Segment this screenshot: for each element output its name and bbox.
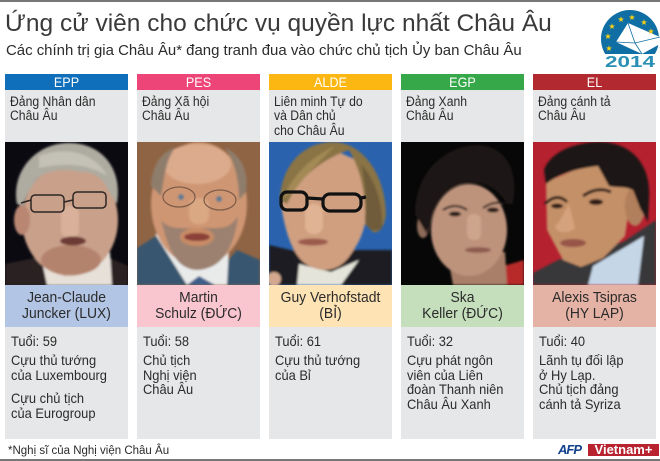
EGP tag <box>401 74 524 90</box>
age: Tuổi: 40 <box>539 333 585 349</box>
biography <box>143 352 197 397</box>
Vietnam+ credit: Vietnam+ <box>595 442 652 457</box>
icon: 2014 election logo: ★ <box>617 15 625 24</box>
EGP tag: EGP <box>449 74 476 90</box>
Vietnam+ credit <box>588 444 659 456</box>
EL tag: EL <box>587 74 602 90</box>
candidate name: Jean-Claude <box>27 290 106 306</box>
bottom rule <box>0 459 660 461</box>
party name: và Dân chủ <box>274 108 336 124</box>
top rule <box>0 0 660 2</box>
age: Tuổi: 59 <box>11 333 57 349</box>
EPP tag <box>5 74 128 90</box>
biography: viên của Liên <box>407 367 483 383</box>
panel: ALDE Verhofstadt <box>269 74 392 439</box>
PES tag: PES <box>186 74 211 90</box>
ALDE tag: ALDE <box>314 74 347 90</box>
icon: 2014 election logo: ★ <box>605 44 613 53</box>
biography: của Luxembourg <box>11 367 107 383</box>
party name: Liên minh Tự do <box>274 94 363 110</box>
biography <box>11 352 107 421</box>
party name <box>538 94 611 124</box>
biography: Chủ tịch <box>143 352 190 368</box>
candidate name: Guy Verhofstadt <box>281 290 380 306</box>
candidate name <box>533 285 656 327</box>
footnote: *Nghị sĩ của Nghị viện Châu Âu <box>8 445 169 457</box>
icon: 2014 election logo: ★ <box>604 32 612 41</box>
icon: 2014 election logo: ★ <box>608 22 616 31</box>
biography: Cựu thủ tướng <box>275 352 360 368</box>
party name: cho Châu Âu <box>274 123 345 139</box>
party name: Đảng cánh tả <box>538 94 611 110</box>
candidate name <box>5 285 128 327</box>
candidate name: Alexis Tsipras <box>552 290 637 306</box>
candidate name <box>401 285 524 327</box>
party name: Đảng Xanh <box>406 94 467 110</box>
icon: 2014 election logo <box>601 10 660 69</box>
EL tag <box>533 74 656 90</box>
age: Tuổi: 32 <box>407 333 453 349</box>
biography: của Bỉ <box>275 367 311 383</box>
party name <box>274 94 363 139</box>
photo: Juncker <box>5 142 128 285</box>
biography: Chủ tịch đảng <box>539 381 618 397</box>
candidate name: (BỈ) <box>319 306 342 322</box>
biography: ở Hy Lạp. <box>539 367 595 383</box>
candidate name: Keller (ĐỨC) <box>422 306 503 322</box>
candidate name <box>137 285 260 327</box>
biography <box>539 352 624 412</box>
photo: Schulz <box>137 142 260 285</box>
photo: Verhofstadt <box>269 142 392 285</box>
biography: Châu Âu Xanh <box>407 396 491 412</box>
title: Ứng cử viên cho chức vụ quyền lực nhất Châu Âu <box>5 10 552 37</box>
panel: EPP Juncker <box>5 74 128 439</box>
candidate name <box>269 285 392 327</box>
EPP tag: EPP <box>54 74 79 90</box>
biography: Châu Âu <box>143 381 193 397</box>
party name: Đảng Nhân dân <box>10 94 95 110</box>
party name: Châu Âu <box>406 108 453 124</box>
biography: Cựu chủ tịch <box>11 390 84 406</box>
ALDE tag <box>269 74 392 90</box>
party name <box>406 94 467 124</box>
icon: 2014 election logo: ★ <box>628 13 636 22</box>
biography: Cựu phát ngôn <box>407 352 493 368</box>
icon: 2014 election logo: ★ <box>647 27 655 36</box>
biography: đoàn Thanh niên <box>407 381 503 397</box>
panel: PES Schulz <box>137 74 260 439</box>
panel: EL Tsipras <box>533 74 656 439</box>
candidate name: Juncker (LUX) <box>22 306 111 322</box>
candidate name: (HY LẠP) <box>565 306 624 322</box>
party name: Châu Âu <box>142 108 189 124</box>
icon: 2014 election logo: ★ <box>640 18 648 27</box>
biography: Nghị viện <box>143 367 197 383</box>
biography: Lãnh tụ đối lập <box>539 352 624 368</box>
biography <box>275 352 360 383</box>
AFP credit: AFP <box>558 442 581 457</box>
candidate name: Martin <box>179 290 218 306</box>
subtitle: Các chính trị gia Châu Âu* đang tranh đua vào chức chủ tịch Ủy ban Châu Âu <box>6 42 522 59</box>
biography <box>407 352 503 412</box>
photo: Keller <box>401 142 524 285</box>
age: Tuổi: 58 <box>143 333 189 349</box>
biography: của Eurogroup <box>11 405 95 421</box>
PES tag <box>137 74 260 90</box>
party name: Đảng Xã hội <box>142 94 209 110</box>
party name <box>10 94 95 124</box>
photo: Tsipras <box>533 142 656 285</box>
party name: Châu Âu <box>10 108 57 124</box>
candidate name: Schulz (ĐỨC) <box>155 306 242 322</box>
party name: Châu Âu <box>538 108 585 124</box>
age: Tuổi: 61 <box>275 333 321 349</box>
candidate name: Ska <box>451 290 474 306</box>
biography: Cựu thủ tướng <box>11 352 96 368</box>
party name <box>142 94 209 124</box>
biography: cánh tả Syriza <box>539 396 621 412</box>
panel: EGP Keller <box>401 74 524 439</box>
